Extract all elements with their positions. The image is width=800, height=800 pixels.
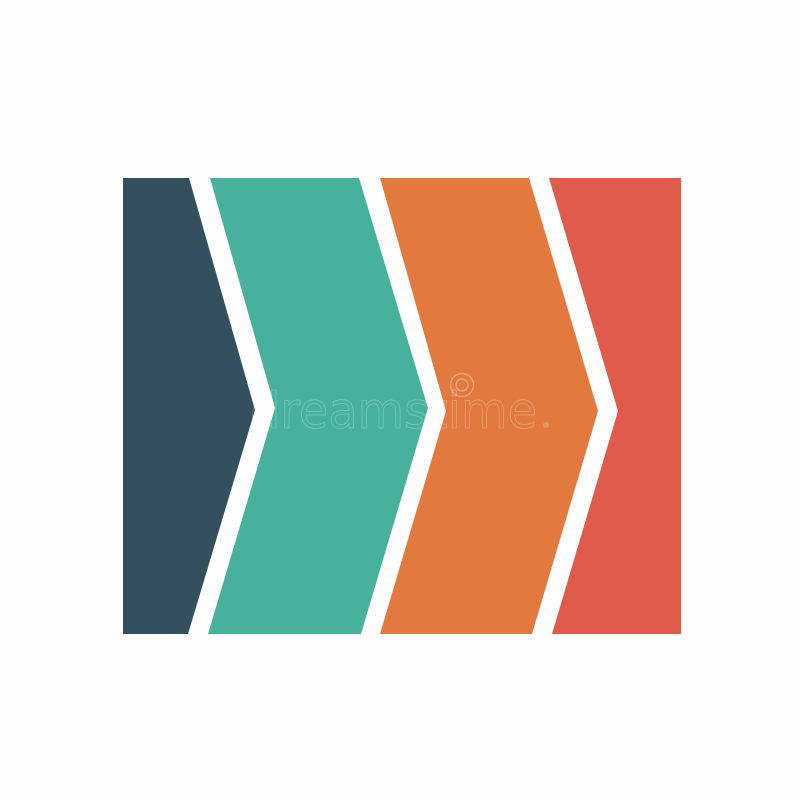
panel: orange chevron segment: [380, 178, 598, 634]
panel: navy arrow segment: [123, 178, 255, 634]
watermark: spiral logo: [450, 374, 474, 396]
panel: teal chevron segment: [208, 178, 428, 634]
watermark: dreamstime text: dreamstime: [250, 382, 537, 440]
watermark: registered mark: [543, 422, 549, 428]
panel: red end segment: [549, 178, 681, 634]
